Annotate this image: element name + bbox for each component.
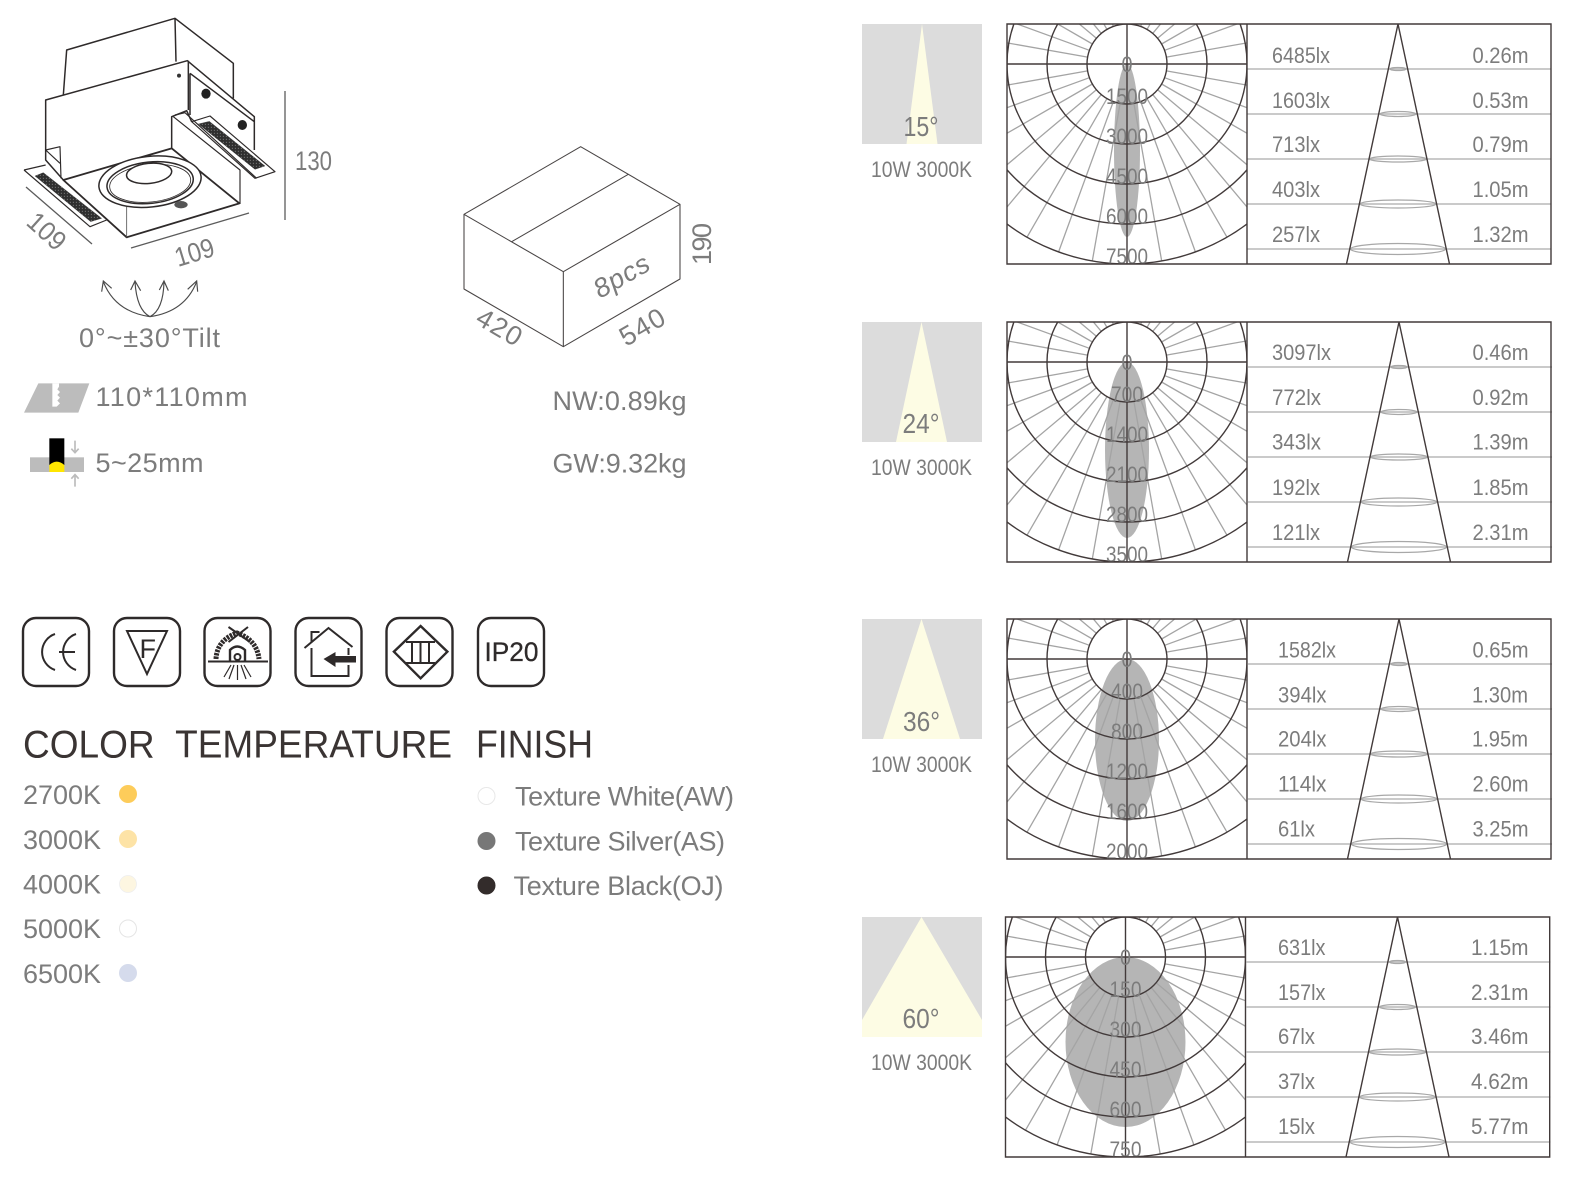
polar chart 60: 750 — [1110, 1137, 1142, 1162]
illuminance table 24: 1.85m — [1472, 475, 1528, 500]
2700K: 2700K — [23, 780, 101, 810]
polar chart 36: 0 — [1122, 647, 1132, 672]
dimension 109 bottom: 109 — [171, 232, 218, 273]
5000K: 5000K — [23, 914, 101, 944]
polar chart 24: 1400 — [1106, 422, 1148, 447]
beam angle graphic 15: 15° — [904, 111, 938, 142]
illuminance table 24: 192lx — [1272, 475, 1321, 500]
chart frame 15 — [1007, 24, 1551, 264]
thickness text: 5~25mm — [96, 448, 204, 478]
polar chart 60: 450 — [1110, 1057, 1142, 1082]
finish list — [478, 782, 734, 901]
illuminance table 24: 343lx — [1272, 430, 1322, 454]
icon: IP20 — [478, 618, 544, 686]
illuminance table 60: 67lx — [1278, 1024, 1316, 1049]
illuminance table 36: 2.60m — [1472, 772, 1528, 796]
power label: 10W 3000K — [871, 157, 972, 182]
illuminance table 15: 6485lx — [1272, 43, 1331, 68]
beam angle graphic 15 — [862, 24, 982, 144]
panel: 36 degree beam — [862, 459, 1552, 864]
texture silver: Texture Silver(AS) — [515, 826, 725, 856]
illuminance table 60: 631lx — [1278, 935, 1326, 960]
illuminance table 60: 37lx — [1278, 1069, 1316, 1094]
illuminance table 60 — [1246, 917, 1550, 1157]
beam angle graphic 60: 60° — [902, 1003, 940, 1034]
illuminance table 36: 0.65m — [1472, 638, 1528, 662]
polar chart 24: 700 — [1111, 382, 1143, 407]
carton dimension 420: 420 — [471, 302, 528, 352]
beam angle graphic 36 — [862, 619, 982, 739]
illuminance table 36 — [1248, 619, 1552, 859]
6500K: 6500K — [23, 959, 101, 989]
polar chart 24: 0 — [1122, 350, 1132, 375]
5000K — [23, 914, 136, 944]
illuminance table 36: 1582lx — [1278, 638, 1337, 662]
polar chart 60: 0 — [1120, 945, 1131, 970]
panel: 60 degree beam — [862, 757, 1550, 1162]
icon: IP20: IP20 — [484, 637, 538, 667]
polar chart 15: 1500 — [1106, 84, 1148, 109]
icon: ceiling thickness — [30, 438, 84, 487]
chart frame 24 — [1007, 322, 1551, 562]
carton dimension 540: 540 — [614, 302, 671, 352]
illuminance table 15: 257lx — [1272, 222, 1321, 247]
3000K — [23, 825, 137, 855]
polar chart 36: 400 — [1111, 679, 1143, 704]
illuminance table 15: 0.79m — [1472, 132, 1528, 157]
polar chart 60: 300 — [1110, 1017, 1142, 1042]
polar chart 60: 150 — [1110, 977, 1142, 1002]
panel: 24 degree beam — [862, 162, 1552, 567]
beam angle graphic 36: 36° — [903, 706, 940, 737]
carton dimension 190: 190 — [687, 223, 717, 265]
net weight: NW:0.89kg — [552, 386, 686, 416]
icon: no insulation cover — [204, 618, 270, 686]
chart frame 60 — [1006, 917, 1550, 1157]
illuminance table 36: 204lx — [1278, 726, 1327, 752]
polar chart 24: 2100 — [1106, 462, 1148, 487]
polar chart 60 — [926, 757, 1326, 1162]
heading: color temperature: COLOR TEMPERATURE — [23, 724, 452, 766]
panel: 15 degree beam — [862, 0, 1551, 269]
icon: indoor use — [296, 618, 362, 686]
tilt label: 0°~±30°Tilt — [79, 323, 220, 353]
polar chart 36 — [927, 459, 1327, 864]
fixture isometric drawing — [24, 18, 275, 237]
icon: cutout — [24, 383, 89, 413]
illuminance table 36: 61lx — [1278, 816, 1316, 842]
product line drawing with dimensions — [21, 18, 332, 353]
illuminance table 15: 713lx — [1272, 132, 1321, 157]
chart frame 36 — [1007, 619, 1551, 859]
illuminance table 36: 1.30m — [1472, 682, 1528, 708]
illuminance table 60: 5.77m — [1471, 1114, 1528, 1139]
3000K: 3000K — [23, 825, 101, 855]
illuminance table 15: 1.32m — [1472, 222, 1528, 247]
illuminance table 36: 114lx — [1278, 772, 1327, 796]
gross weight: GW:9.32kg — [552, 448, 686, 478]
polar chart 15: 7500 — [1106, 244, 1148, 269]
beam angle graphic 24 — [862, 322, 982, 442]
polar chart 36: 1600 — [1106, 799, 1148, 824]
polar chart 24: 3500 — [1106, 542, 1148, 567]
illuminance table 15: 403lx — [1272, 177, 1321, 202]
color temperature list — [23, 780, 137, 989]
4000K: 4000K — [23, 870, 101, 900]
polar chart 15: 4500 — [1106, 164, 1148, 189]
dimension 130: 130 — [295, 146, 332, 176]
illuminance table 15: 0.26m — [1472, 43, 1528, 68]
illuminance table 24: 121lx — [1272, 520, 1321, 545]
dimension 109 left: 109 — [21, 206, 72, 257]
illuminance table 36: 394lx — [1278, 682, 1327, 708]
packaging carton diagram — [464, 147, 717, 478]
beam angle graphic 60 — [862, 917, 982, 1037]
dimension lines — [26, 91, 285, 248]
certification icons row — [23, 618, 544, 686]
illuminance table 24: 0.46m — [1472, 340, 1528, 365]
illuminance table 15 — [1247, 24, 1551, 264]
illuminance table 24: 3097lx — [1272, 340, 1332, 365]
heading: finish: FINISH — [476, 724, 593, 766]
polar chart 36: 1200 — [1106, 759, 1148, 784]
illuminance table 15: 1.05m — [1472, 177, 1528, 202]
illuminance table 24: 772lx — [1272, 385, 1322, 410]
polar chart 15: 0 — [1122, 52, 1132, 77]
illuminance table 15: 0.53m — [1472, 88, 1528, 113]
illuminance table 60: 3.46m — [1471, 1024, 1528, 1049]
illuminance table 60: 4.62m — [1471, 1069, 1528, 1094]
illuminance table 60: 2.31m — [1471, 980, 1528, 1005]
2700K — [23, 780, 137, 810]
power label: 10W 3000K — [871, 752, 972, 777]
icon: class III — [386, 618, 452, 686]
power label: 10W 3000K — [871, 1050, 972, 1075]
polar chart 60: 600 — [1110, 1097, 1142, 1122]
power label: 10W 3000K — [871, 455, 972, 480]
cutout size spec — [24, 382, 247, 413]
polar chart 15: 3000 — [1106, 124, 1148, 149]
cutout text: 110*110mm — [96, 382, 248, 412]
texture black: Texture Black(OJ) — [514, 871, 724, 901]
illuminance table 24: 0.92m — [1472, 385, 1528, 410]
polar chart 24: 2800 — [1106, 502, 1148, 527]
polar chart 15: 6000 — [1106, 204, 1148, 229]
carton outline — [464, 147, 680, 347]
icon: CE — [23, 618, 89, 686]
ceiling thickness spec — [30, 438, 203, 487]
6500K — [23, 959, 137, 989]
illuminance table 24 — [1248, 322, 1552, 562]
polar chart 36: 800 — [1111, 719, 1143, 744]
tilt arrows icon — [102, 281, 198, 317]
illuminance table 15: 1603lx — [1272, 88, 1331, 113]
carton quantity: 8pcs — [588, 248, 655, 304]
illuminance table 24: 1.39m — [1472, 430, 1528, 454]
polar chart 15 — [927, 0, 1327, 269]
illuminance table 60: 157lx — [1278, 980, 1326, 1005]
illuminance table 24: 2.31m — [1472, 520, 1528, 545]
illuminance table 60: 1.15m — [1471, 935, 1528, 960]
polar chart 24 — [927, 162, 1327, 567]
polar chart 36: 2000 — [1106, 839, 1148, 864]
icon: F mark: F — [140, 634, 156, 664]
texture white: Texture White(AW) — [515, 782, 734, 812]
4000K — [23, 870, 136, 900]
illuminance table 36: 1.95m — [1472, 726, 1528, 752]
illuminance table 36: 3.25m — [1472, 816, 1528, 842]
icon: F mark — [114, 618, 180, 686]
beam angle graphic 24: 24° — [902, 408, 940, 439]
illuminance table 60: 15lx — [1278, 1114, 1316, 1139]
